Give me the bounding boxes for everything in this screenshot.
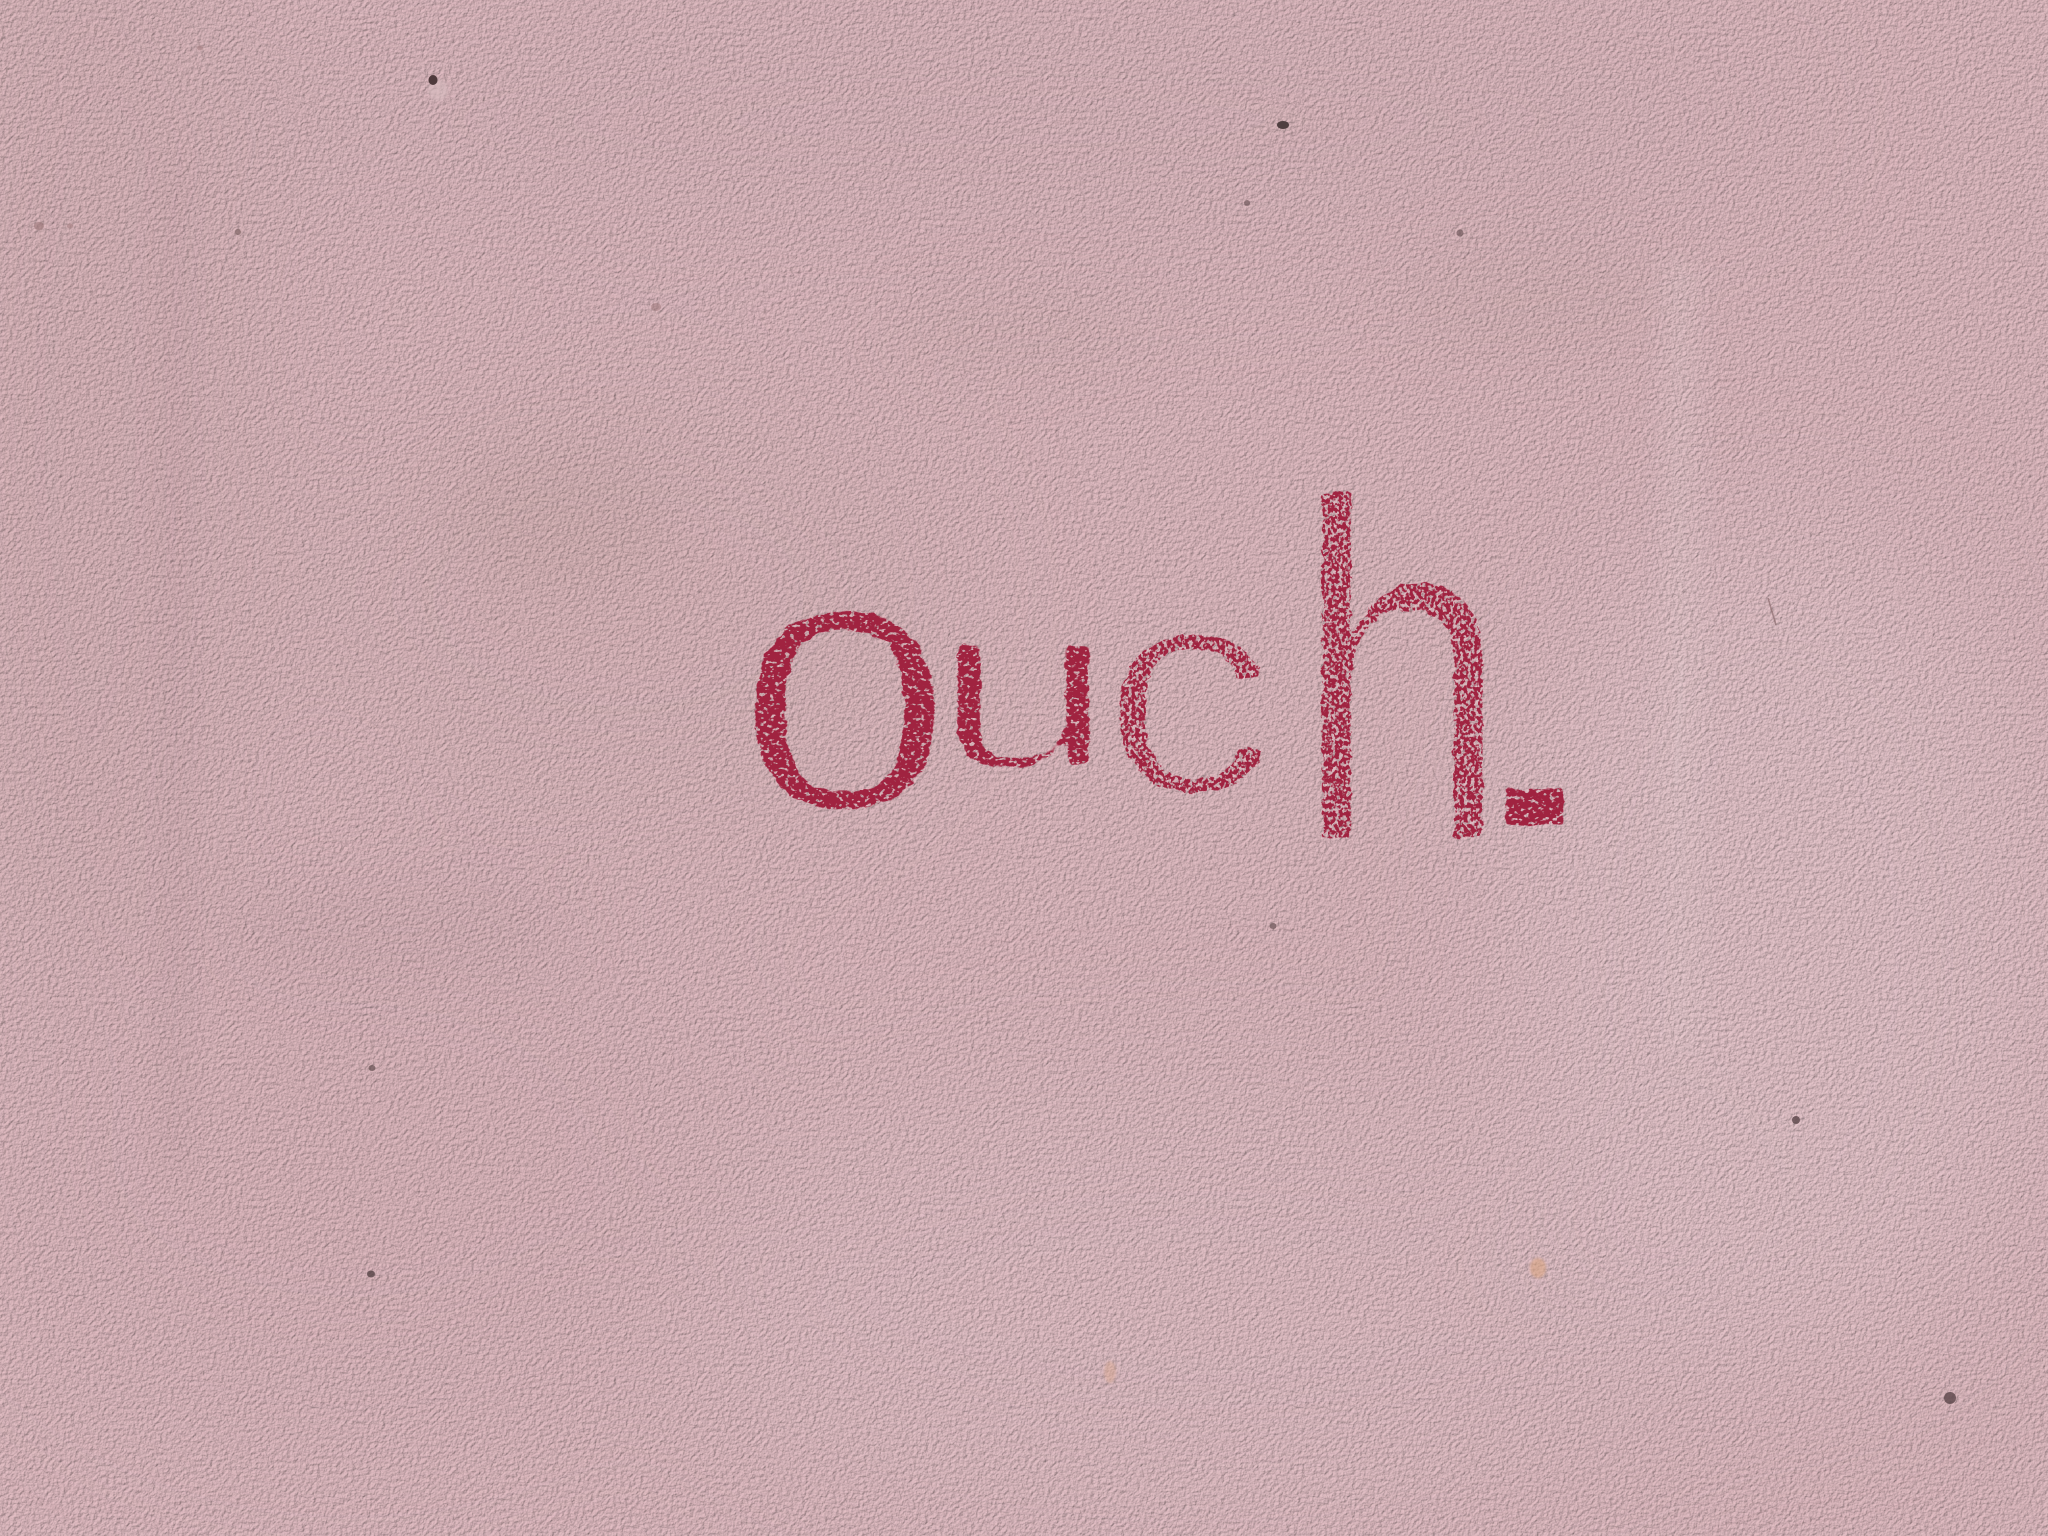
painted word: ouch.: o: [735, 474, 954, 889]
painted word: ouch.: h: [1292, 402, 1511, 944]
painted word: ouch.: [735, 402, 1628, 944]
painted word: ouch.: .: [1441, 475, 1628, 911]
painted word: ouch.: u: [934, 553, 1114, 819]
painted word: ouch.: c: [1101, 521, 1276, 857]
